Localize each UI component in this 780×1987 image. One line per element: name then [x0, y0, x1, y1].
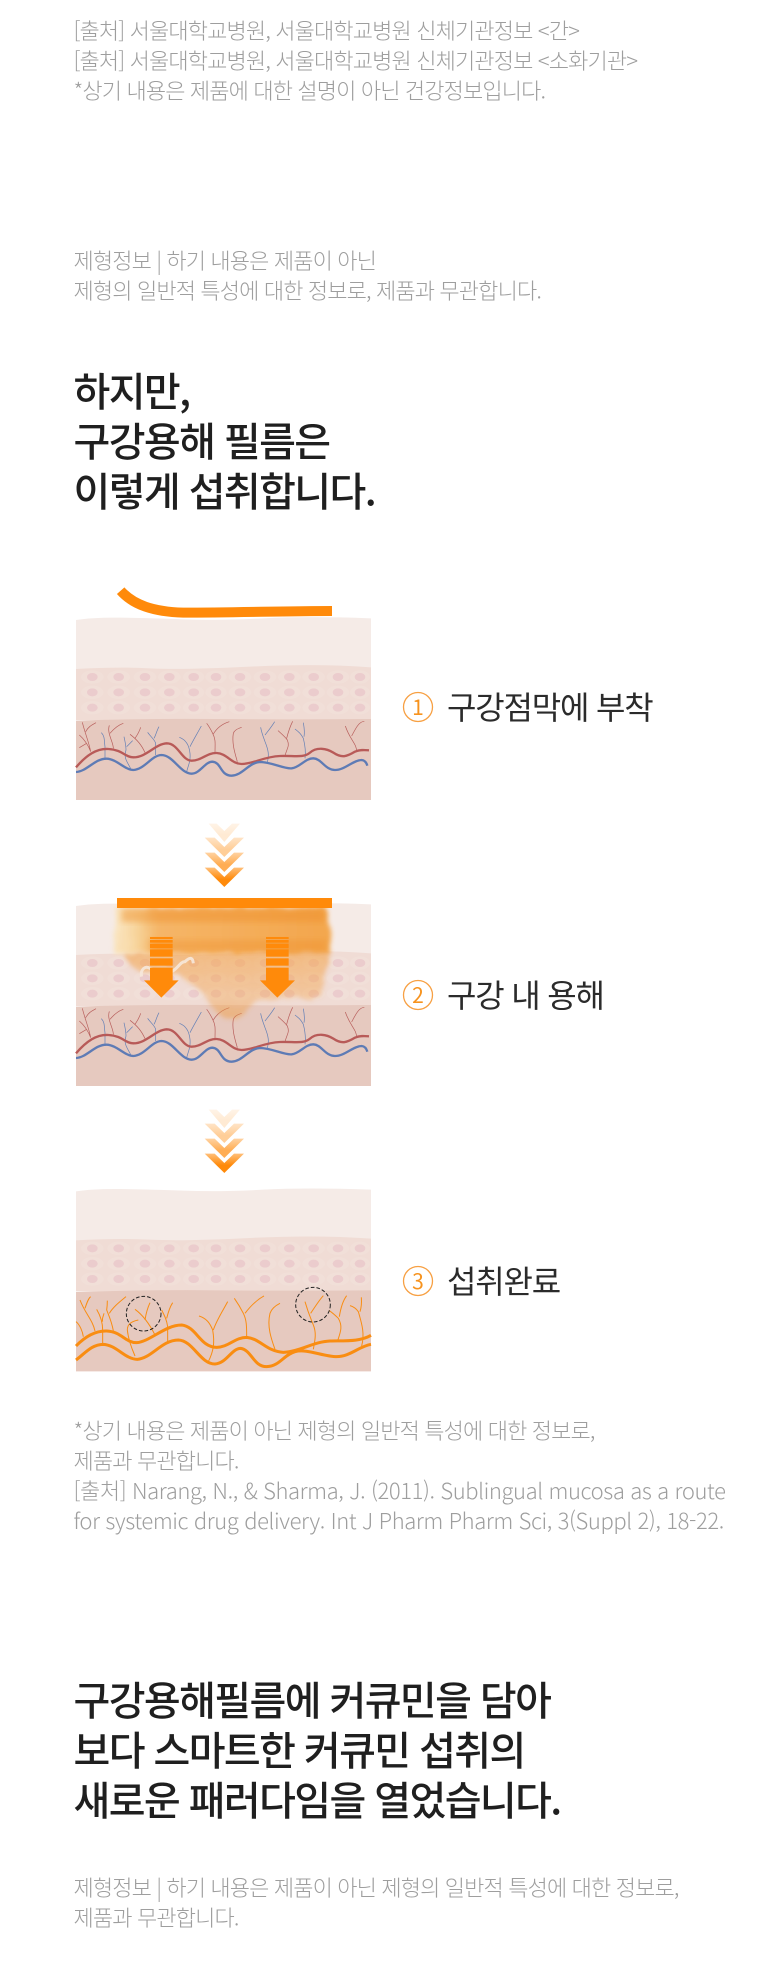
heading: how film is taken	[74, 360, 375, 518]
chevrons between step 1 and step 2	[205, 824, 244, 887]
source notes: [출처] 서울대학교병원, 서울대학교병원 신체기관정보 <소화기관>	[74, 44, 637, 76]
step 2 illustration: film dissolving in mouth	[76, 898, 371, 1086]
closing formulation note	[74, 1871, 679, 1933]
down arrow left	[144, 937, 179, 998]
dashed highlight circles	[126, 1287, 330, 1331]
step 1 label: 구강점막에 부착	[447, 683, 652, 729]
formulation note	[74, 244, 541, 306]
heading: how film is taken: 구강용해 필름은	[74, 410, 330, 468]
step 1 illustration: film attached to mucosa	[76, 591, 371, 800]
step number 2	[404, 980, 432, 1010]
formulation note: 제형의 일반적 특성에 대한 정보로, 제품과 무관합니다.	[74, 274, 541, 306]
disclaimer and citation: for systemic drug delivery. Int J Pharm Pharm Sci, 3(Suppl 2), 18-22.	[74, 1504, 724, 1536]
chevrons between step 2 and step 3	[205, 1110, 244, 1173]
step number 3	[404, 1266, 432, 1296]
step 2 label: 구강 내 용해	[447, 971, 604, 1017]
orange absorbed vessels	[76, 1296, 371, 1367]
step number 2: 2	[412, 980, 424, 1010]
step number 3: 3	[412, 1266, 424, 1296]
step 3 illustration: absorption complete	[76, 1188, 371, 1371]
source notes: [출처] 서울대학교병원, 서울대학교병원 신체기관정보 <간>	[74, 14, 579, 46]
closing heading: 새로운 패러다임을 열었습니다.	[74, 1769, 561, 1827]
heading: how film is taken: 이렇게 섭취합니다.	[74, 460, 375, 518]
closing formulation note: 제형정보 | 하기 내용은 제품이 아닌 제형의 일반적 특성에 대한 정보로,	[74, 1871, 679, 1903]
disclaimer and citation: 제품과 무관합니다.	[74, 1444, 239, 1476]
film: flat strip	[117, 898, 332, 908]
disclaimer and citation: *상기 내용은 제품이 아닌 제형의 일반적 특성에 대한 정보로,	[74, 1414, 595, 1446]
disclaimer and citation	[74, 1414, 726, 1536]
source notes: *상기 내용은 제품에 대한 설명이 아닌 건강정보입니다.	[74, 74, 545, 106]
dissolving stain	[113, 907, 332, 1018]
closing formulation note: 제품과 무관합니다.	[74, 1901, 239, 1933]
disclaimer and citation: [출처] Narang, N., & Sharma, J. (2011). Sublingual mucosa as a route	[74, 1474, 726, 1506]
step number 1: 1	[412, 692, 424, 722]
closing heading: 구강용해필름에 커큐민을 담아	[74, 1669, 550, 1727]
down arrow right	[260, 937, 295, 998]
source notes	[74, 14, 638, 106]
step 3 label: 섭취완료	[447, 1257, 560, 1303]
step number 1	[404, 692, 432, 722]
closing heading: 보다 스마트한 커큐민 섭취의	[74, 1719, 525, 1777]
film: curved strip	[121, 591, 332, 613]
closing heading	[74, 1669, 561, 1827]
formulation note: 제형정보 | 하기 내용은 제품이 아닌	[74, 244, 376, 276]
heading: how film is taken: 하지만,	[74, 360, 189, 418]
